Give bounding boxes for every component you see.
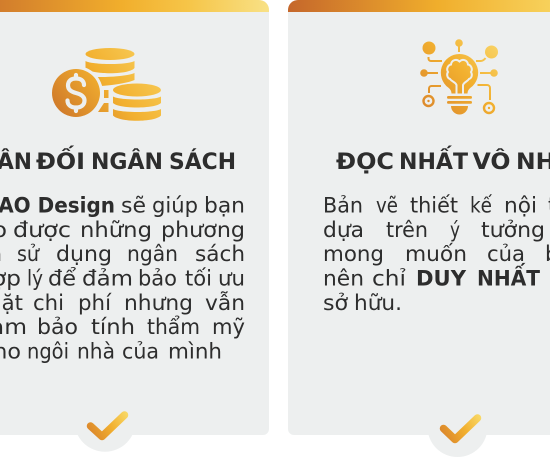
text block: unique description: NHẤT (477, 262, 540, 292)
text block: budget description: sẽ (121, 194, 146, 218)
text block: budget description: để (48, 266, 76, 292)
heading: unique: VÔ (472, 147, 510, 175)
icon: coins (49, 48, 161, 121)
text block: unique description: mong (323, 242, 384, 267)
text block: budget description: nhà (77, 339, 115, 364)
panel: budget balance card (0, 0, 269, 452)
text block: budget description: sử (17, 242, 40, 267)
heading: budget balance: ĐỐI (36, 144, 85, 175)
card background (288, 0, 550, 435)
card top gradient bar (0, 0, 269, 12)
icon: check badge (74, 390, 136, 452)
text block: budget description: ngôi (27, 339, 69, 364)
card top gradient bar (288, 0, 550, 12)
text block: budget description: ngân (127, 242, 178, 267)
heading: unique: ĐỌC (336, 149, 394, 175)
text block: unique description: muốn (405, 242, 467, 267)
icon: dollar sign (68, 75, 84, 111)
heading: budget balance (0, 144, 236, 175)
text block: budget description: được (13, 218, 71, 243)
text block: budget description: tối (185, 266, 212, 292)
text block: budget description (0, 194, 245, 364)
text block: budget description: giúp (152, 194, 198, 218)
text block: budget description: bạn (204, 194, 245, 218)
text block: budget description: lý (27, 266, 43, 292)
text block: unique description: vẽ (376, 194, 398, 218)
text block: unique description: sở (323, 291, 348, 316)
text block: budget description: mình (168, 339, 222, 364)
panel: unique design card (288, 0, 550, 457)
text block: budget description: thẩm (147, 315, 200, 340)
text block: budget description: những (80, 218, 152, 243)
text block: unique description: của (487, 242, 525, 267)
text block: budget description: của (122, 339, 159, 364)
text block: unique description: ý (450, 218, 460, 243)
text block: budget description: ưu (218, 266, 245, 292)
text block: unique description: Bản (323, 194, 363, 218)
text block: budget description: bảo (138, 266, 177, 292)
heading: budget balance: SÁCH (169, 147, 236, 175)
text block: budget description: dụng (56, 242, 112, 267)
heading: budget balance: NGÂN (91, 147, 163, 175)
text block: unique description: hữu. (354, 291, 402, 316)
card background (0, 0, 269, 435)
text block: unique description: trên (386, 218, 428, 243)
text block: unique description (323, 194, 550, 316)
heading: unique: NHẤT (399, 144, 469, 175)
icon: light bulb with brain (420, 39, 498, 115)
text block: budget description: vẫn (205, 290, 245, 316)
text block: budget description: phương (161, 218, 245, 243)
text block: unique description: kế (470, 194, 493, 218)
text block: unique description: DUY (416, 266, 466, 292)
brain (447, 60, 472, 94)
text block: unique description: nội (504, 194, 537, 218)
icon: check badge (428, 397, 488, 457)
text block: unique description: chỉ (372, 266, 406, 292)
text block: budget description: đảm (82, 266, 133, 292)
text block: budget description: nhưng (124, 291, 193, 316)
text block: unique description: dựa (323, 218, 364, 243)
text block: budget description: chi (33, 291, 64, 316)
text block: budget description: bảo (37, 315, 78, 340)
text block: unique description: nên (323, 266, 364, 292)
text block: budget description: mỹ (212, 315, 245, 340)
heading: unique (336, 144, 550, 175)
text block: unique description: tưởng (481, 218, 545, 243)
text block: budget description: phí (78, 291, 112, 316)
text block: budget description: sách (195, 242, 245, 267)
text block: budget description: tính (91, 315, 135, 340)
text block: unique description: thiết (410, 194, 458, 218)
